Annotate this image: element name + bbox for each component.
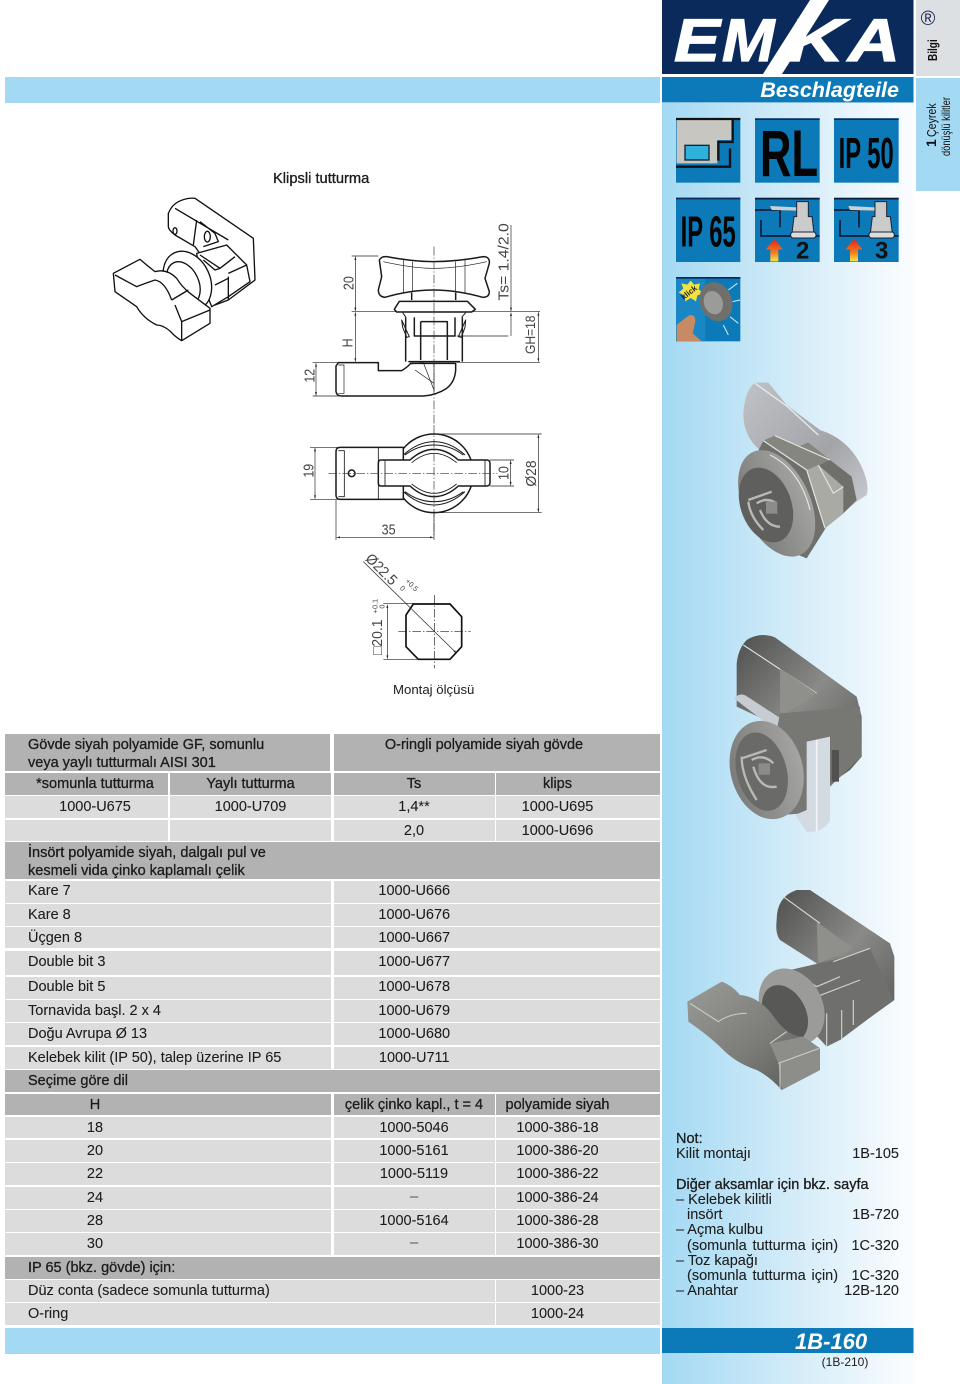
specification table: Tornavida başl. 2 x 4 xyxy=(28,1003,161,1019)
specification table: 1000-386-24 xyxy=(516,1190,599,1206)
icon: IP 65 xyxy=(676,198,740,262)
Beschlagteile banner: Beschlagteile xyxy=(760,78,899,102)
section heading: tongue selection: Seçime göre dil xyxy=(28,1073,128,1089)
specification table: Yaylı tutturma xyxy=(206,776,295,792)
EMKA logo: M xyxy=(722,7,776,75)
dimension labels: 10 xyxy=(495,466,512,480)
specification table: 30 xyxy=(87,1236,103,1252)
product render: lever lock xyxy=(723,383,867,569)
row: part numbers 1,4 xyxy=(5,796,168,818)
icon: two-point mount xyxy=(755,198,820,265)
technical drawing: mounting cutout: □20.1 xyxy=(370,619,386,655)
specification table: 1000-U676 xyxy=(378,907,450,923)
specification table: 1000-5046 xyxy=(379,1120,449,1136)
table head: body and O-ring body: veya yaylı tutturmalı AISI 301 xyxy=(28,754,216,770)
table head: body and O-ring body xyxy=(5,734,330,771)
icon: klick insertion: klick xyxy=(679,283,699,302)
icon: panel profile xyxy=(676,118,740,183)
dimension labels: Ts= 1.4/2.0 xyxy=(496,223,512,301)
EMKA logo: K xyxy=(786,7,850,74)
dimension lines xyxy=(310,225,542,540)
row: tongue headers: H xyxy=(90,1096,100,1112)
icon: IP 65: IP 65 xyxy=(681,208,736,256)
heading: Klipsli tutturma: Klipsli tutturma xyxy=(273,171,370,187)
specification table: 28 xyxy=(87,1213,103,1229)
icon row group xyxy=(676,116,899,341)
technical drawing: mounting cutout: +0.1 xyxy=(370,599,379,613)
specification table: Kelebek kilit (IP 50), talep üzerine IP 65 xyxy=(28,1050,281,1066)
row: mounting headers: *somunla tutturma xyxy=(36,776,154,792)
rows: tongue part numbers: 18 xyxy=(87,1120,103,1136)
section heading: inserts: İnsört polyamide siyah, dalgalı pul ve xyxy=(28,845,266,861)
specification table: 1000-386-20 xyxy=(516,1143,599,1159)
specification table: 1000-5164 xyxy=(379,1213,449,1229)
row: mounting headers xyxy=(5,773,168,794)
notes block: – Anahtar xyxy=(676,1283,738,1299)
icon: IP 50: IP 50 xyxy=(839,129,894,178)
EMKA logo xyxy=(662,0,914,75)
product render: wing knob lock xyxy=(687,890,894,1090)
specification table: 1000-U680 xyxy=(378,1026,450,1042)
specification table: 1000-386-30 xyxy=(516,1236,599,1252)
section heading: tongue selection xyxy=(5,1070,660,1092)
rows: inserts xyxy=(5,881,331,902)
accessory list: – Kelebek kilitli xyxy=(676,1192,772,1208)
row: part numbers 1,4: 1000-U675 xyxy=(59,799,131,815)
row: tongue headers xyxy=(5,1094,331,1115)
icon: three-point mount xyxy=(834,198,899,265)
dimension labels: 20 xyxy=(340,276,357,290)
other accessories heading: Diğer aksamlar için bkz. sayfa xyxy=(676,1177,869,1193)
notes block: 1C-320 xyxy=(851,1238,899,1254)
specification table: 20 xyxy=(87,1143,103,1159)
specification table: 22 xyxy=(87,1166,103,1182)
side tab: Çeyrek dönüşlü kilitler xyxy=(916,78,960,191)
specification table: Ts xyxy=(407,776,421,792)
section heading: inserts xyxy=(5,842,660,879)
specification table: Double bit 3 xyxy=(28,954,105,970)
side tab: Çeyrek dönüşlü kilitler: Çeyrek xyxy=(925,103,939,137)
old page reference: (1B-210) xyxy=(822,1355,868,1369)
notes block: 1B-105 xyxy=(852,1146,899,1162)
specification table: 1000-U678 xyxy=(378,979,450,995)
EMKA logo: E xyxy=(674,6,722,74)
icon: RL: RL xyxy=(760,116,818,190)
note heading: Not: xyxy=(676,1131,703,1147)
section heading: inserts: kesmeli vida çinko kaplamalı çelik xyxy=(28,863,245,879)
dimension labels: 19 xyxy=(300,464,317,478)
rows: tongue part numbers xyxy=(5,1116,331,1138)
page number banner xyxy=(662,1328,914,1354)
dimension labels: GH=18 xyxy=(522,316,538,354)
dimension labels xyxy=(300,223,540,538)
notes block: (somunla tutturma için) xyxy=(687,1268,838,1284)
section heading: IP 65 xyxy=(5,1257,660,1278)
specification table: 24 xyxy=(87,1190,103,1206)
notes block: 12B-120 xyxy=(844,1283,899,1299)
rows: seals: Düz conta (sadece somunla tutturma) xyxy=(28,1283,270,1299)
technical drawing: side and top views xyxy=(300,223,542,540)
specification table: 1000-U696 xyxy=(522,822,593,838)
caption: Montaj ölçüsü: Montaj ölçüsü xyxy=(393,682,474,697)
specification table: Double bit 5 xyxy=(28,979,105,995)
section heading: IP 65: IP 65 (bkz. gövde) için: xyxy=(28,1260,175,1276)
specification table: Kare 8 xyxy=(28,907,71,923)
specification table: 1000-U709 xyxy=(215,799,286,815)
notes block: 1C-320 xyxy=(851,1268,899,1284)
specification table: polyamide siyah xyxy=(506,1096,609,1112)
row: part numbers 2,0 xyxy=(5,820,168,841)
specification table: 1000-U666 xyxy=(378,883,450,899)
side tab: Bilgi: Bilgi xyxy=(927,39,940,61)
specification table: çelik çinko kapl., t = 4 xyxy=(345,1096,483,1112)
icon: IP 50 xyxy=(834,118,899,183)
dimension labels: Ø28 xyxy=(524,460,540,487)
specification table: 1000-23 xyxy=(531,1283,584,1299)
line art: isometric lock xyxy=(113,198,255,341)
specification table: 1000-U695 xyxy=(522,799,593,815)
specification table: 1000-5119 xyxy=(380,1166,448,1182)
notes block: 1B-720 xyxy=(852,1207,899,1223)
dimension labels: 35 xyxy=(382,521,396,538)
dimension labels: H xyxy=(339,338,356,347)
notes block xyxy=(676,1131,899,1299)
Beschlagteile banner xyxy=(662,77,914,102)
note: lock mounting: Kilit montajı xyxy=(676,1146,751,1162)
product render: flat lever lock xyxy=(719,635,862,832)
sidebar gradient panel xyxy=(662,103,914,1384)
specification table: 1000-U711 xyxy=(379,1050,450,1066)
specification table: 1000-386-18 xyxy=(516,1120,599,1136)
specification table: 2,0 xyxy=(404,822,424,838)
icon: three-point mount: 3 xyxy=(875,238,888,265)
bottom blue band xyxy=(5,1328,660,1354)
rows: inserts: Kare 7 xyxy=(28,883,71,899)
technical drawing: mounting cutout: 0 xyxy=(378,605,387,609)
top blue band xyxy=(5,77,660,103)
specification table: Üçgen 8 xyxy=(28,930,82,946)
technical drawing: mounting cutout: Ø22.5 xyxy=(362,551,400,589)
icon: klick insertion xyxy=(676,277,740,341)
specification table: – xyxy=(410,1235,418,1251)
specification table: 1000-U679 xyxy=(378,1003,450,1019)
center lines xyxy=(328,247,497,535)
specification table: 1000-5161 xyxy=(379,1143,449,1159)
side tab: Çeyrek dönüşlü kilitler: dönüşlü kilitler xyxy=(941,97,953,156)
specification table: klips xyxy=(543,776,572,792)
specification table: 1000-U677 xyxy=(378,954,450,970)
specification table: – xyxy=(410,1189,418,1205)
notes block: (somunla tutturma için) xyxy=(687,1238,838,1254)
specification table: 1000-386-28 xyxy=(516,1213,599,1229)
notes block: – Toz kapağı xyxy=(676,1253,758,1269)
technical drawing: mounting cutout: 0 xyxy=(398,584,407,593)
notes block: – Açma kulbu xyxy=(676,1222,763,1238)
specification table: 1,4** xyxy=(398,799,430,815)
side tab: Bilgi xyxy=(916,0,960,76)
dimension labels: 12 xyxy=(302,369,318,383)
technical drawing: mounting cutout: +0.5 xyxy=(404,577,420,593)
specification table: 1000-24 xyxy=(531,1306,584,1322)
rows: seals xyxy=(5,1280,494,1302)
specification table: O-ring xyxy=(28,1306,68,1322)
top view xyxy=(336,434,490,513)
specification table: 1000-U667 xyxy=(378,930,450,946)
icon: two-point mount: 2 xyxy=(796,238,809,265)
notes block: insört xyxy=(687,1207,722,1223)
side tab: Çeyrek dönüşlü kilitler: 1 xyxy=(923,139,939,147)
specification table: Doğu Avrupa Ø 13 xyxy=(28,1026,147,1042)
side tab: Bilgi: ® xyxy=(921,8,936,30)
table head: body and O-ring body: Gövde siyah polyamide GF, somunlu xyxy=(28,736,264,752)
EMKA logo: A xyxy=(846,8,900,75)
side view xyxy=(336,257,489,396)
technical drawing: mounting cutout xyxy=(362,551,471,668)
specification table: 1000-386-22 xyxy=(516,1166,599,1182)
page number banner: 1B-160 xyxy=(795,1329,868,1354)
specification table: O-ringli polyamide siyah gövde xyxy=(385,736,583,752)
